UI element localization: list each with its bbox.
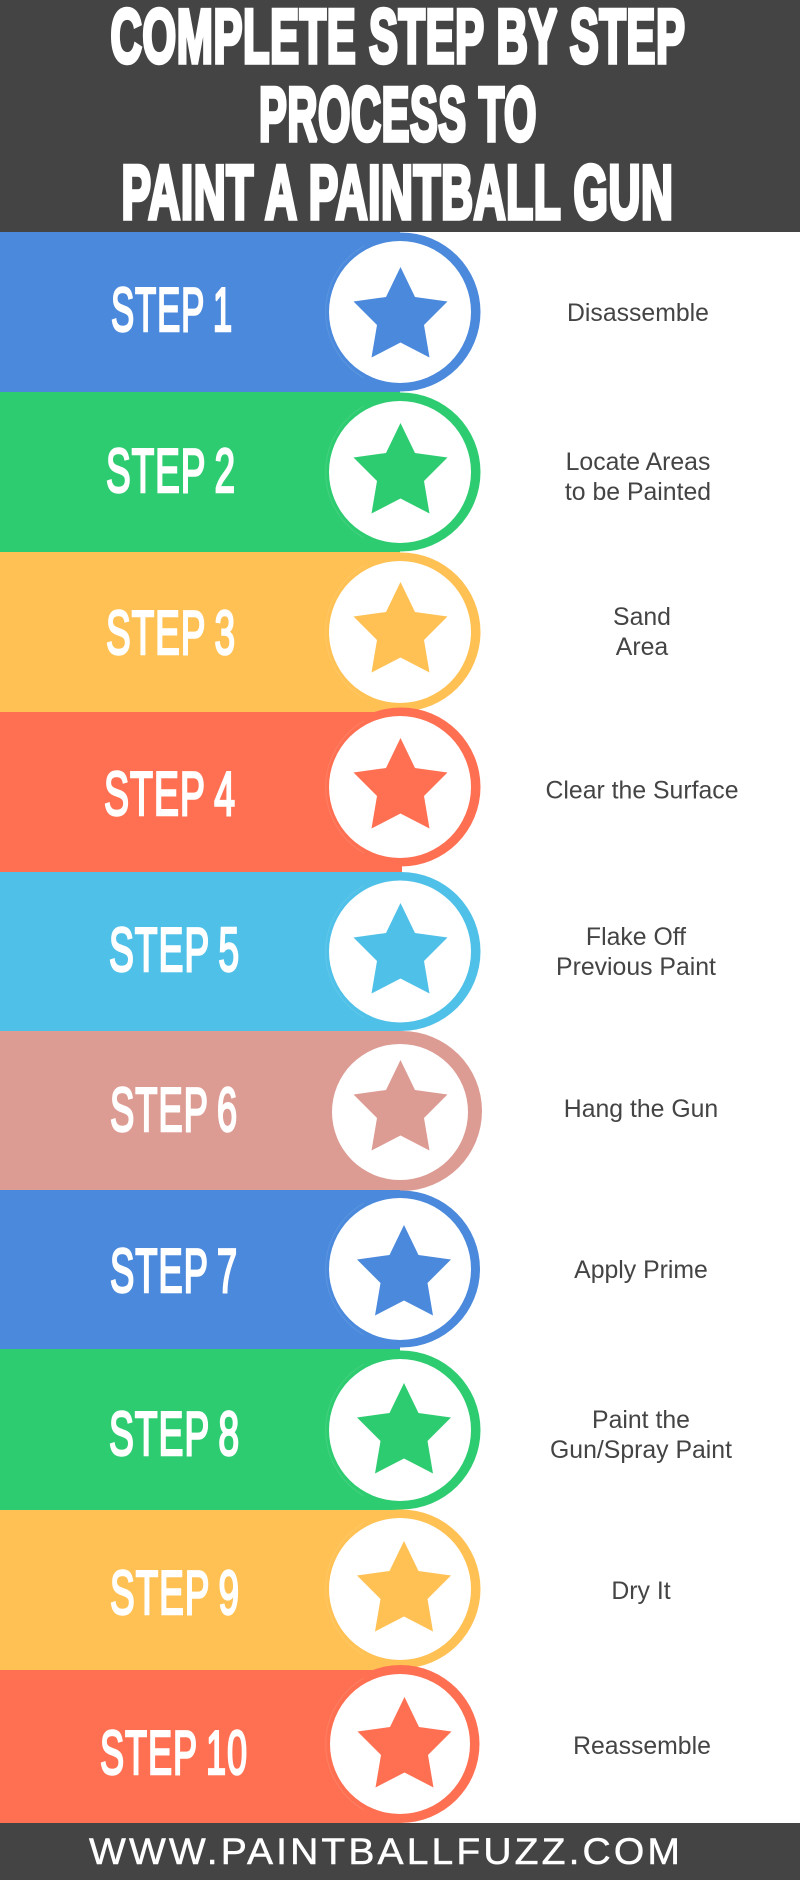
step 3 row: STEP 3 bbox=[106, 598, 236, 668]
step 5 row: Flake Off bbox=[586, 924, 686, 951]
step 8 row bbox=[0, 1349, 732, 1510]
step 8 row: Gun/Spray Paint bbox=[550, 1437, 732, 1464]
step 10 row: Reassemble bbox=[573, 1733, 711, 1760]
header banner with title bbox=[0, 0, 800, 236]
title: PROCESS TO bbox=[259, 72, 537, 158]
step 4 row: STEP 4 bbox=[104, 759, 236, 829]
step 2 row bbox=[0, 392, 711, 552]
step 1 row bbox=[0, 232, 709, 392]
step 6 row: Hang the Gun bbox=[564, 1096, 718, 1123]
step 2 row: Locate Areas bbox=[566, 449, 710, 476]
footer banner with website bbox=[0, 1823, 800, 1880]
footer banner with website: WWW.PAINTBALLFUZZ.COM bbox=[89, 1830, 683, 1872]
step 1 row: STEP 1 bbox=[111, 275, 233, 345]
step 9 row bbox=[0, 1510, 671, 1670]
title bbox=[110, 0, 686, 236]
step 6 row: STEP 6 bbox=[110, 1075, 238, 1145]
step 5 row: STEP 5 bbox=[109, 915, 240, 985]
step 7 row: STEP 7 bbox=[110, 1236, 238, 1306]
step 3 row: Area bbox=[616, 634, 668, 661]
step 7 row bbox=[0, 1190, 708, 1349]
step 10 row: STEP 10 bbox=[100, 1718, 248, 1788]
step 9 row: STEP 9 bbox=[110, 1558, 240, 1628]
step 4 row: Clear the Surface bbox=[546, 778, 738, 804]
step 5 row: Previous Paint bbox=[556, 954, 716, 981]
step 3 row bbox=[0, 552, 671, 712]
step 9 row: Dry It bbox=[611, 1578, 671, 1605]
step 2 row: to be Painted bbox=[565, 479, 711, 506]
step 1 row: Disassemble bbox=[567, 300, 709, 327]
step 5 row bbox=[0, 872, 716, 1031]
step 8 row: Paint the bbox=[592, 1407, 690, 1434]
step 2 row: STEP 2 bbox=[106, 436, 236, 506]
step 8 row: STEP 8 bbox=[109, 1399, 240, 1469]
step 7 row: Apply Prime bbox=[574, 1257, 708, 1284]
step 10 row bbox=[0, 1665, 711, 1823]
step 3 row: Sand bbox=[613, 604, 671, 631]
step 6 row bbox=[0, 1031, 718, 1191]
step 4 row bbox=[0, 708, 738, 872]
